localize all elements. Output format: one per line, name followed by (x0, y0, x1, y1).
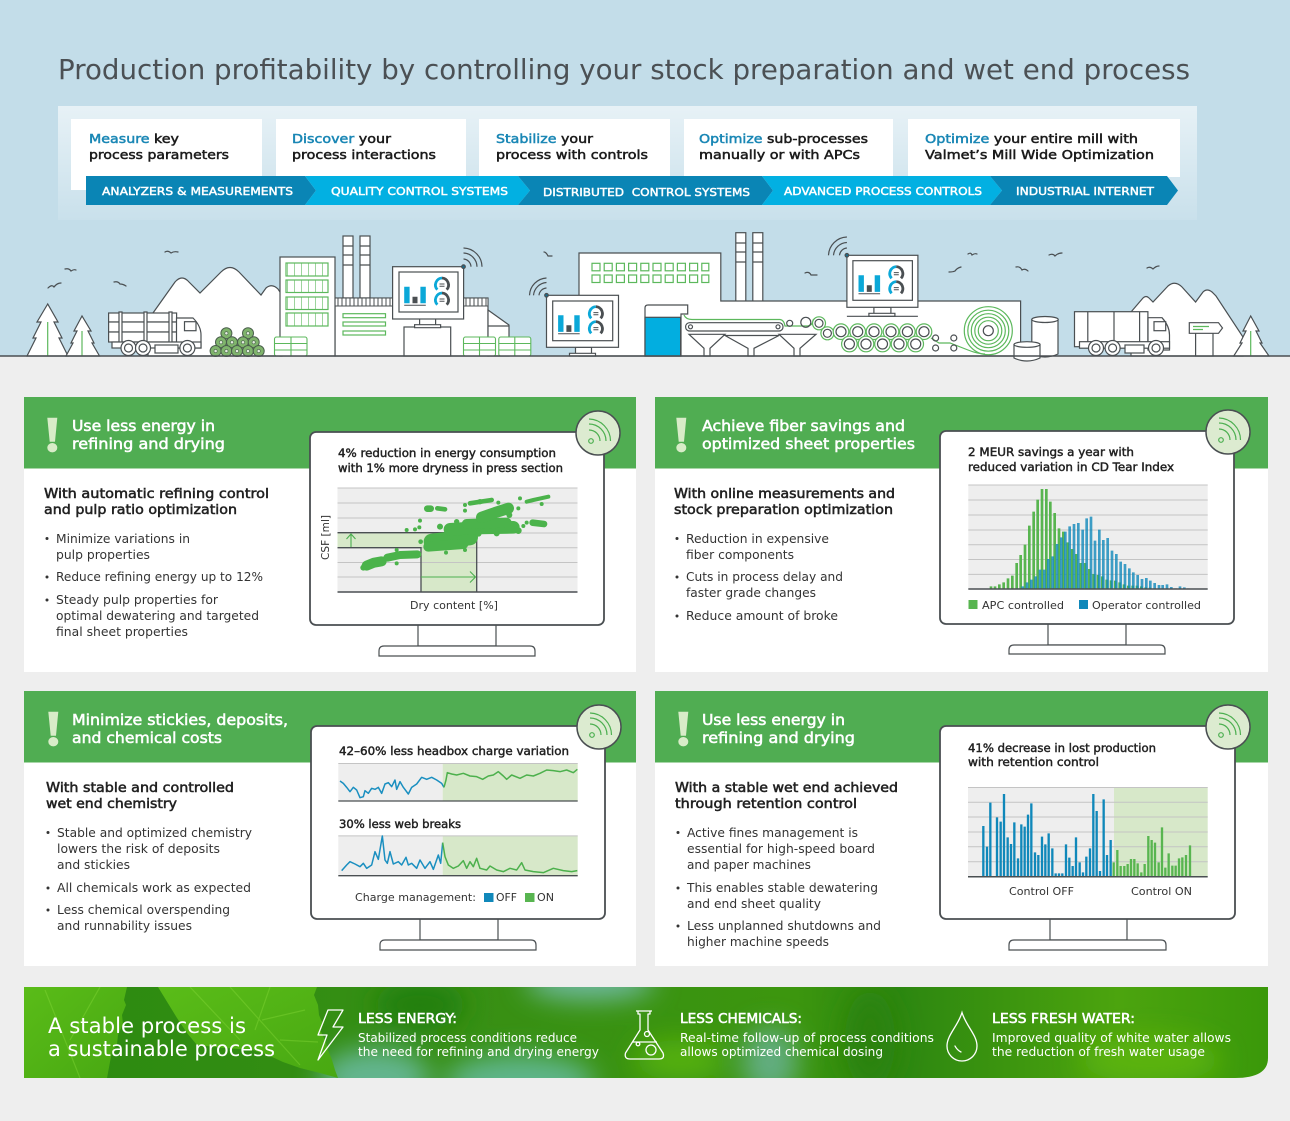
card: measure: Measure key (89, 131, 180, 146)
bullet list: optimal dewatering and targeted (56, 609, 259, 623)
subheading: wet end chemistry (46, 796, 177, 812)
icon: exclamation (676, 418, 686, 452)
icon: logging truck (109, 312, 201, 356)
arrow: quality control (305, 176, 530, 205)
x-axis labels: Control OFF (1009, 885, 1074, 898)
icon: bales (274, 337, 531, 356)
icon: cylinders (1014, 316, 1058, 361)
icon: delivery truck (1074, 312, 1170, 356)
badge: wireless (1206, 410, 1250, 454)
monitor with histogram (940, 431, 1234, 654)
bullet list: fiber components (686, 548, 794, 562)
bullet list: and paper machines (687, 858, 811, 872)
chart title: headbox: 42–60% less headbox charge variation (339, 744, 569, 758)
bullet list: Less unplanned shutdowns and (687, 919, 881, 933)
icon: exclamation (47, 418, 57, 452)
legend: Operator controlled (1092, 599, 1201, 612)
banner background (24, 987, 1268, 1078)
arrow band: control systems (86, 176, 1178, 205)
legend (968, 599, 1201, 612)
line chart: web breaks (338, 836, 578, 876)
chart title: with retention control (968, 755, 1099, 769)
block: less energy: LESS ENERGY: (358, 1012, 457, 1027)
bullet list: and stickies (57, 858, 130, 872)
bullet list: Active fines management is (687, 826, 858, 840)
card: optimize mill: Optimize your entire mill with (925, 131, 1138, 146)
icon: wireless signal 1 (462, 248, 482, 269)
heading: Achieve fiber savings and (702, 417, 905, 435)
illustration: mill landscape (0, 233, 1290, 361)
bullet list: Cuts in process delay and (686, 570, 843, 584)
panel: minimize stickies (24, 691, 636, 966)
badge: wireless (577, 705, 621, 749)
block: less fresh water: the reduction of fresh water usage (992, 1045, 1205, 1059)
bullet list: lowers the risk of deposits (57, 842, 220, 856)
subheading: With automatic refining control (44, 486, 269, 502)
heading: optimized sheet properties (702, 435, 915, 453)
bullet list (676, 532, 843, 623)
block: less chemicals: LESS CHEMICALS: (680, 1012, 802, 1027)
heading (72, 711, 288, 747)
legend: Charge management: (355, 891, 476, 904)
chart title: web breaks: 30% less web breaks (339, 817, 461, 831)
histogram (968, 485, 1208, 589)
card: discover: Discover your (292, 131, 392, 146)
sky background (0, 0, 1290, 356)
subheading: With online measurements and (674, 486, 895, 502)
title: Production profitability by controlling your stock preparation and wet end process (58, 53, 1190, 86)
header band (655, 691, 1268, 762)
chart title: reduced variation in CD Tear Index (968, 460, 1174, 474)
icon: factory right (579, 233, 1021, 356)
card: optimize sub-processes: manually or with APCs (699, 147, 860, 162)
icon: flask (625, 1011, 664, 1059)
icon: paper reel (964, 307, 1012, 355)
page background (0, 356, 1290, 1121)
block: less energy: Stabilized process conditions reduce (358, 1031, 577, 1045)
heading: refining and drying (702, 729, 855, 747)
bullet list: Reduction in expensive (686, 532, 829, 546)
bullet list: faster grade changes (686, 586, 816, 600)
header band (24, 397, 636, 468)
card: stabilize: Stabilize your (496, 131, 594, 146)
x-axis labels: Control ON (1131, 885, 1192, 898)
monitor with line charts (311, 726, 605, 950)
subheading (46, 780, 234, 812)
bullet list (46, 532, 263, 639)
arrow: advanced process (762, 176, 1002, 205)
bullet list: This enables stable dewatering (686, 881, 878, 895)
monitor with bar chart (940, 726, 1235, 950)
icon: left tree large (27, 304, 68, 356)
card: stabilize (479, 119, 670, 177)
bullet list: Reduce amount of broke (686, 609, 838, 623)
card: measure: process parameters (89, 147, 229, 162)
icon: water drop (947, 1012, 977, 1061)
block: less chemicals: allows optimized chemical dosing (680, 1045, 883, 1059)
bullet list (46, 826, 252, 933)
icon: exclamation (678, 712, 688, 746)
subheading: With a stable wet end achieved (675, 780, 898, 796)
panel: use less energy (refining) (24, 397, 636, 672)
y-axis label: CSF [ml] (319, 515, 332, 560)
icon: right mountains (1131, 283, 1243, 356)
leaf right (158, 987, 338, 1078)
subheading: through retention control (675, 796, 857, 812)
ground line (0, 355, 1290, 357)
icon: monitor 3 (847, 255, 918, 316)
icon: log pile (210, 328, 264, 356)
bullet list: essential for high-speed board (687, 842, 875, 856)
banner heading: A stable process is (48, 1014, 246, 1038)
panel: sustainability banner (24, 987, 1268, 1078)
panel: maturity steps (58, 106, 1197, 220)
chart title: 2 MEUR savings a year with (968, 445, 1134, 459)
subheading (44, 486, 269, 518)
line chart: headbox charge (338, 763, 578, 801)
block: less fresh water (992, 1012, 1231, 1059)
banner heading (48, 1014, 275, 1061)
chart title (968, 445, 1174, 474)
icon: lightning (318, 1010, 343, 1060)
heading: Use less energy in (72, 417, 215, 435)
header band (655, 397, 1268, 468)
legend: OFF (496, 891, 517, 904)
arrow: distributed control (518, 176, 773, 205)
block: less fresh water: Improved quality of white water allows (992, 1031, 1231, 1045)
bullet list: Steady pulp properties for (56, 593, 218, 607)
heading: refining and drying (72, 435, 225, 453)
icon: paper machine (684, 315, 985, 356)
block: less chemicals: Real-time follow-up of process conditions (680, 1031, 934, 1045)
card: optimize mill: Valmet’s Mill Wide Optimization (925, 147, 1154, 162)
chart title: with 1% more dryness in press section (338, 461, 563, 475)
monitor with scatter chart (310, 432, 604, 656)
badge: wireless (576, 411, 620, 455)
card: optimize mill (908, 119, 1180, 177)
subheading (674, 486, 895, 518)
bullet list: higher machine speeds (687, 935, 829, 949)
block: less energy (358, 1012, 599, 1059)
arrow: distributed control: DISTRIBUTED CONTROL SYSTEMS (543, 186, 750, 199)
leaf left (24, 987, 127, 1078)
scatter chart (338, 488, 578, 592)
bullet list: final sheet properties (56, 625, 188, 639)
x-axis label: Dry content [%] (410, 599, 498, 612)
chart title: 41% decrease in lost production (968, 741, 1156, 755)
icon: right tree (1234, 316, 1269, 356)
card: optimize sub-processes (684, 119, 893, 177)
card: stabilize: process with controls (496, 147, 648, 162)
icon: factory left (280, 236, 509, 356)
bar chart (968, 787, 1208, 877)
bullet list: Less chemical overspending (57, 903, 230, 917)
icon: headbox tank (645, 305, 688, 356)
icon: birds (48, 251, 1159, 288)
subheading (675, 780, 898, 812)
heading (72, 417, 225, 453)
arrow: analyzers: ANALYZERS & MEASUREMENTS (102, 185, 293, 198)
subheading: and pulp ratio optimization (44, 502, 237, 518)
arrow: industrial internet: INDUSTRIAL INTERNET (1016, 185, 1154, 198)
bullet list: Stable and optimized chemistry (57, 826, 252, 840)
chart title (338, 446, 563, 475)
legend (355, 891, 554, 904)
heading (702, 711, 855, 747)
bullet list: Reduce refining energy up to 12% (56, 570, 263, 584)
icon: signpost (1189, 323, 1222, 356)
subheading: With stable and controlled (46, 780, 234, 796)
block: less chemicals (680, 1012, 934, 1059)
arrow: analyzers (86, 176, 316, 205)
bullet list: and end sheet quality (687, 897, 821, 911)
heading (702, 417, 915, 453)
heading: and chemical costs (72, 729, 222, 747)
subheading: stock preparation optimization (674, 502, 893, 518)
card: discover: process interactions (292, 147, 436, 162)
legend: ON (537, 891, 554, 904)
bullet list: and runnability issues (57, 919, 192, 933)
block: less energy: the need for refining and drying energy (358, 1045, 599, 1059)
heading: Use less energy in (702, 711, 845, 729)
legend: APC controlled (982, 599, 1064, 612)
panel: fiber savings (655, 397, 1268, 672)
icon: monitor 1 (393, 267, 464, 328)
arrow: advanced process: ADVANCED PROCESS CONTROLS (784, 185, 982, 198)
arrow: industrial internet (990, 176, 1178, 205)
icon: left tree small (66, 316, 100, 356)
icon: wireless signal 3 (828, 237, 849, 257)
icon: exclamation (48, 712, 58, 746)
bullet list: All chemicals work as expected (57, 881, 251, 895)
card: discover (276, 119, 466, 177)
block: less fresh water: LESS FRESH WATER: (992, 1012, 1135, 1027)
card: measure (71, 119, 262, 190)
icon: monitor 2 (546, 295, 618, 356)
banner heading: a sustainable process (48, 1037, 275, 1061)
heading: Minimize stickies, deposits, (72, 711, 288, 729)
badge: wireless (1206, 705, 1250, 749)
bullet list (676, 826, 881, 949)
bullet list: pulp properties (56, 548, 150, 562)
icon: wireless signal 2 (530, 278, 548, 297)
x-axis labels (1009, 885, 1192, 898)
header band (24, 691, 636, 762)
bullet list: Minimize variations in (56, 532, 190, 546)
panel: use less energy (wet end) (655, 691, 1268, 966)
chart title (968, 741, 1156, 769)
chart title: 4% reduction in energy consumption (338, 446, 556, 460)
card: optimize sub-processes: Optimize sub-processes (699, 131, 868, 146)
icon: left mountains (148, 268, 282, 356)
arrow: quality control: QUALITY CONTROL SYSTEMS (331, 185, 508, 198)
